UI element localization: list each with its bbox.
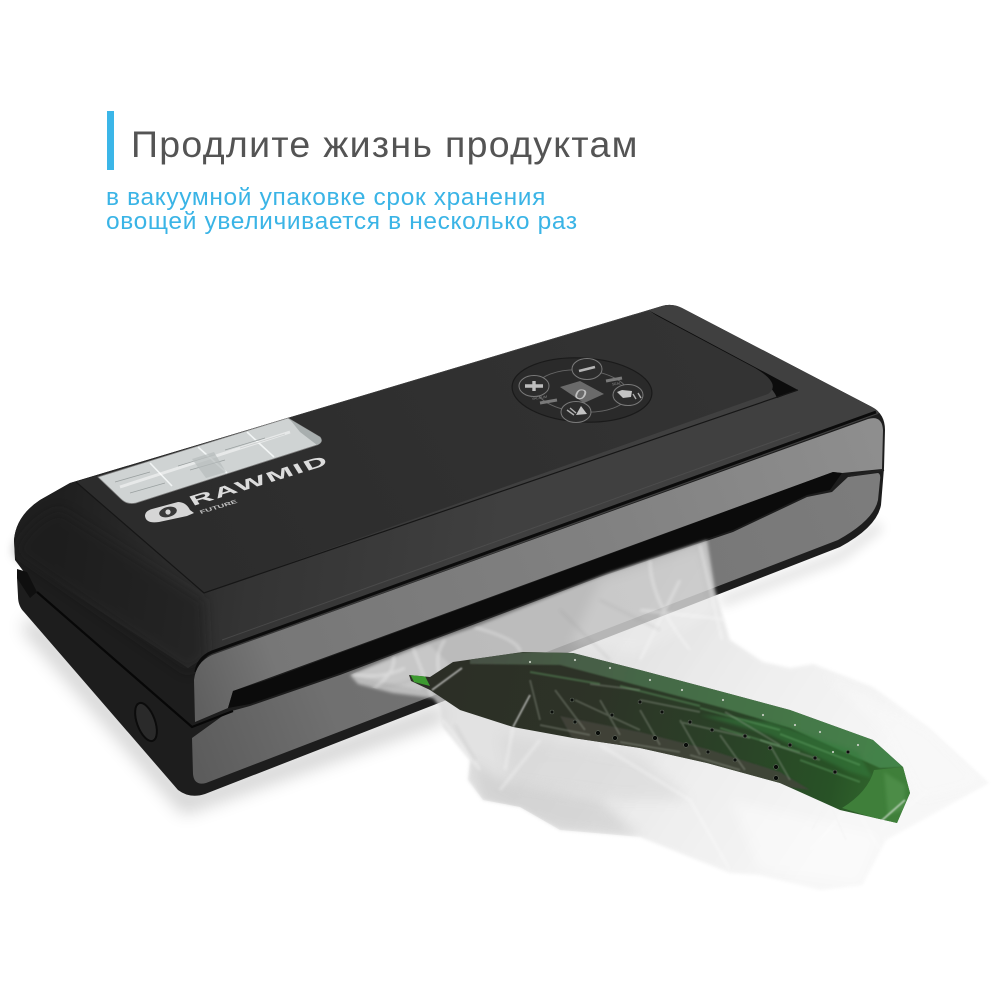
logo wordmark: RAWMID (186, 453, 333, 509)
vacuum bag with cucumber (350, 540, 989, 890)
brand logo (145, 453, 333, 522)
subtitle: в вакуумной упаковке срок хранения (106, 184, 546, 211)
connecting ring (535, 367, 629, 415)
bag wrinkles (351, 544, 894, 836)
seam notch (17, 569, 37, 598)
minus button (572, 358, 602, 380)
recessed wedge (648, 310, 798, 398)
side button (131, 700, 161, 744)
LED display (560, 381, 604, 403)
subtitle (106, 184, 578, 234)
cucumber specks (529, 659, 859, 753)
title: Продлите жизнь продуктам (131, 123, 639, 165)
vacuum selector (532, 395, 557, 403)
device shadow (28, 525, 880, 804)
seal button (613, 384, 643, 406)
cucumber grey underside (560, 716, 810, 790)
cucumber stem (410, 675, 430, 686)
control panel (510, 354, 654, 426)
logo tagline: FUTURE (198, 498, 239, 515)
cucumber green ribs (700, 715, 872, 778)
cucumber tip (842, 767, 912, 825)
plastic bag (350, 540, 989, 890)
cucumber pimples (550, 698, 850, 780)
cucumber (409, 650, 912, 825)
product illustration: vacuum sealer with bagged cucumber (9, 304, 984, 880)
cucumber tip light (885, 775, 904, 812)
plus button (519, 376, 549, 396)
clear window (98, 418, 321, 504)
subtitle: овощей увеличивается в несколько раз (106, 208, 578, 234)
right seam (848, 470, 884, 476)
film folds over cucumber (432, 668, 905, 840)
LED display: 0 (572, 386, 590, 403)
vacuum sealer (14, 305, 885, 796)
cucumber wrinkles (530, 680, 820, 780)
seal selector: SEAL (612, 381, 621, 386)
seal selector (606, 378, 622, 386)
front edge gloss (196, 412, 876, 672)
black slot (228, 472, 842, 708)
device body (14, 305, 885, 796)
logo icon (145, 502, 194, 522)
top frame (14, 305, 879, 668)
accent bar (107, 111, 114, 170)
vacuum selector: VACUUM (532, 395, 547, 401)
cucumber highlight band (470, 650, 903, 768)
seam line (37, 592, 233, 727)
upper grey panel (194, 418, 883, 722)
panel disc (510, 354, 654, 426)
lid panel (76, 311, 773, 593)
lower grey panel (192, 473, 880, 784)
start button (561, 402, 591, 422)
lid edge line (76, 390, 798, 593)
side face shading (15, 510, 207, 672)
frame double line (222, 432, 800, 640)
